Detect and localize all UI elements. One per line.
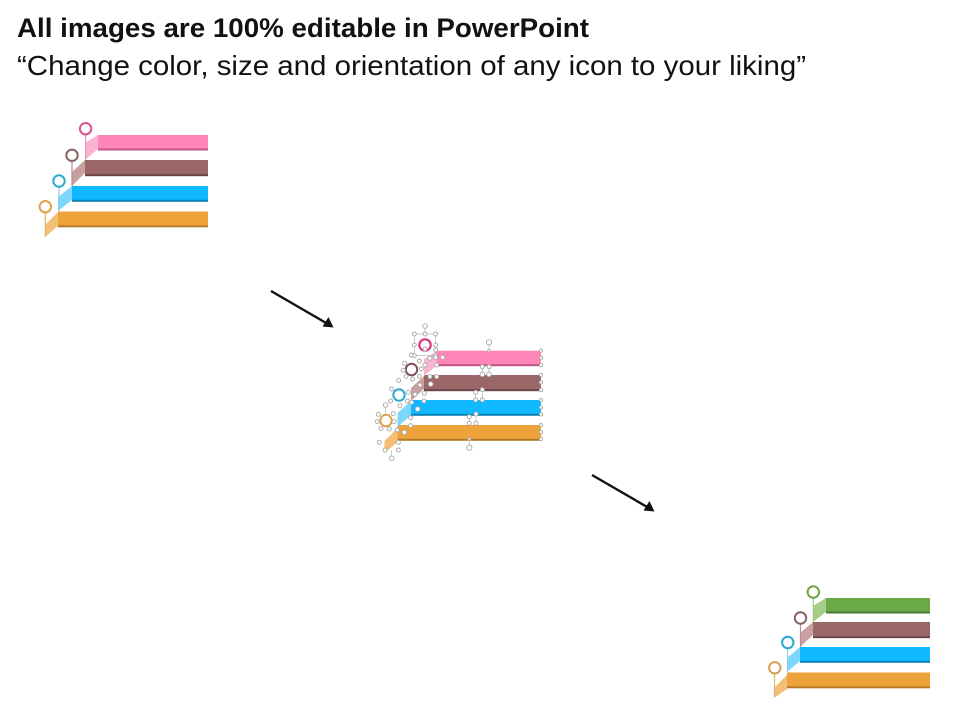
step graphic: centre staircase with selection handles bbox=[375, 324, 543, 461]
pink step bbox=[80, 123, 208, 160]
arrow: centre to bottom-right bbox=[592, 475, 654, 512]
step graphic: bottom-right recoloured staircase bbox=[769, 586, 930, 698]
orange step bbox=[40, 201, 208, 237]
pink step bbox=[419, 339, 541, 376]
subheading: change color, size and orientation: “Change color, size and orientation of any icon to your liking” bbox=[17, 50, 806, 81]
brown step bbox=[795, 612, 930, 647]
blue step bbox=[393, 389, 541, 427]
arrow: top-left to centre bbox=[271, 291, 334, 328]
blue step bbox=[53, 175, 208, 211]
heading: editable in PowerPoint: All images are 100% editable in PowerPoint bbox=[17, 13, 589, 43]
step graphic: top-left four-colour staircase bbox=[40, 123, 208, 237]
brown step bbox=[66, 150, 208, 186]
orange step bbox=[380, 415, 541, 453]
orange step bbox=[769, 662, 930, 698]
selection handles bbox=[375, 324, 543, 461]
blue step bbox=[782, 637, 930, 672]
green step bbox=[808, 586, 930, 622]
brown step bbox=[406, 364, 541, 401]
